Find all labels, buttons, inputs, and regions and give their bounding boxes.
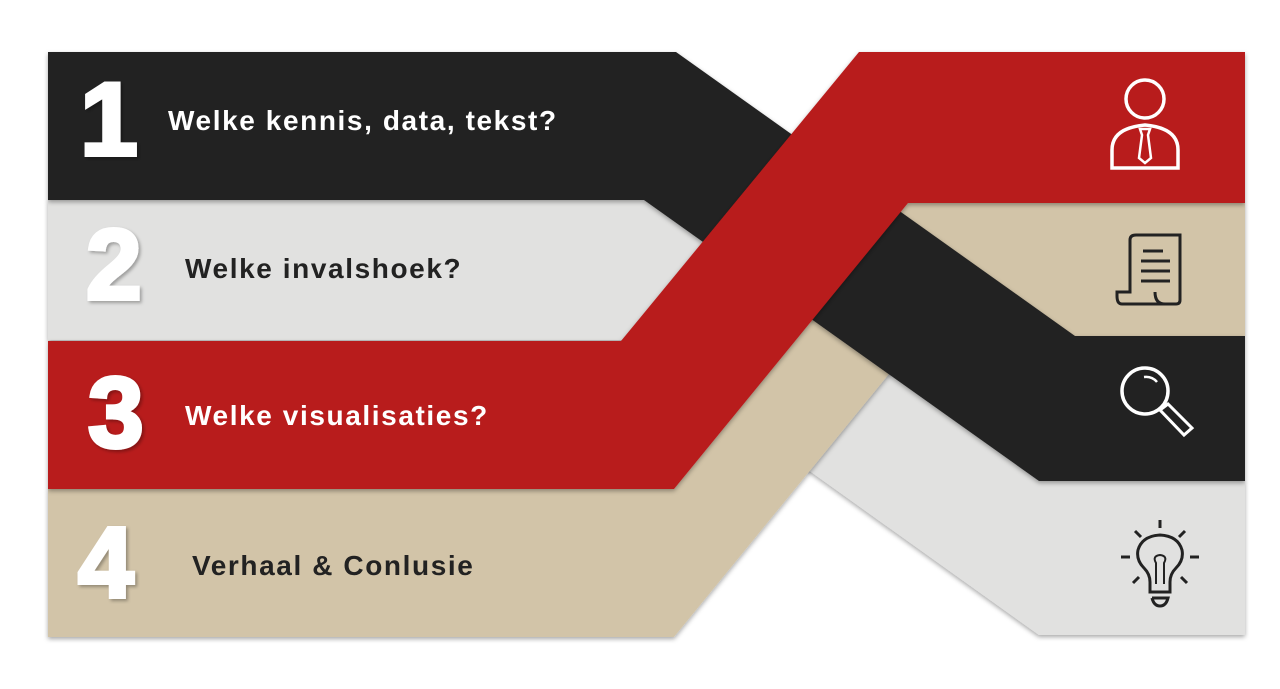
label 3: Welke visualisaties? [185,400,489,431]
number 1: 1 [80,62,138,178]
label 2: Welke invalshoek? [185,253,462,284]
icon: magnifier [1122,368,1192,435]
number 3: 3 [88,357,144,469]
label 1: Welke kennis, data, tekst? [168,105,558,136]
icon: lightbulb [1121,520,1199,606]
band: gray (step 2) [48,200,1245,635]
band: tan (step 4) [48,203,1245,637]
icon: person [1112,80,1178,168]
icon: document [1117,235,1180,304]
band: red (step 3) [48,52,1245,489]
label 4: Verhaal & Conlusie [192,550,474,581]
number 4: 4 [78,507,134,619]
band: black (step 1) [48,52,1245,481]
number 2: 2 [86,209,142,321]
